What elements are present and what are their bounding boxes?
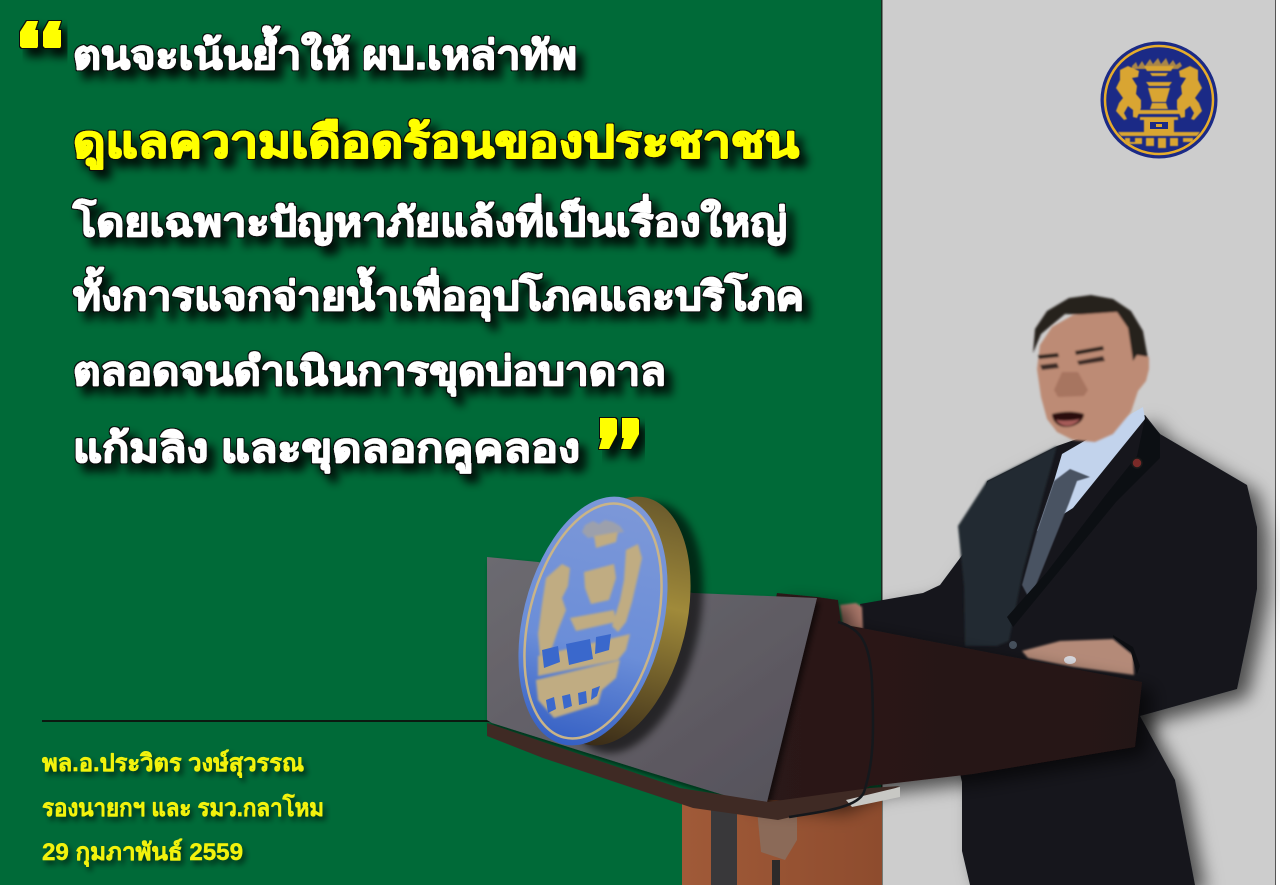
head [1033, 295, 1149, 442]
lectern leg wood [682, 795, 882, 885]
mouth [1052, 412, 1084, 427]
attribution text block [42, 749, 324, 868]
suit jacket left panel [958, 446, 1057, 646]
panel: grey photo panel [881, 0, 1276, 885]
footer divider line [42, 720, 490, 722]
panel: green quote panel [0, 0, 881, 885]
icon: government seal [1100, 42, 1218, 158]
nose shade [1054, 372, 1088, 397]
eyebrows [1038, 346, 1104, 359]
face [1037, 312, 1149, 442]
quote line 1: ตนจะเน้นย้ำให้ ผบ.เหล่าทัพ [73, 26, 577, 78]
attribution role: รองนายกฯ และ รมว.กลาโหม [42, 793, 324, 822]
quote line 4: ทั้งการแจกจ่ายน้ำเพื่ออุปโภคและบริโภค [73, 267, 804, 322]
lectern [487, 557, 1142, 885]
lectern emblem disc [494, 481, 727, 768]
hair [1033, 295, 1149, 366]
disc gold rim [517, 481, 715, 761]
panel divider line [881, 0, 882, 885]
attribution date: 29 กุมภาพันธ์ 2559 [42, 838, 243, 868]
person: speaker [840, 295, 1257, 885]
disc shadow [537, 488, 727, 768]
icon: opening quotation mark [20, 21, 61, 48]
lectern white strip [846, 787, 900, 807]
left hand [840, 603, 863, 629]
lectern underside strip [487, 723, 900, 820]
lectern top grey face [487, 557, 817, 802]
disc emblem pattern [536, 520, 642, 718]
ring [1064, 656, 1076, 664]
lapel pin [1132, 458, 1142, 468]
lectern front dark panel [735, 593, 1142, 804]
watch [1113, 635, 1140, 674]
icon: closing quotation mark [599, 418, 639, 449]
right edge line [1275, 0, 1276, 885]
right hand on lectern [1022, 639, 1134, 675]
disc face [494, 481, 692, 761]
quote text block [72, 26, 804, 474]
lapel [1007, 418, 1160, 627]
disc blue motifs [542, 634, 611, 713]
eyes [1040, 356, 1105, 370]
attribution name: พล.อ.ประวิตร วงษ์สุวรรณ [42, 749, 304, 779]
quote line 2 highlighted: ดูแลความเดือดร้อนของประชาชน [73, 118, 799, 169]
jacket button [1009, 641, 1017, 649]
shirt collar [1037, 407, 1145, 531]
microphone cable [789, 622, 873, 817]
quote line 3: โดยเฉพาะปัญหาภัยแล้งที่เป็นเรื่องใหญ่ [72, 194, 787, 246]
necktie [1022, 469, 1090, 600]
quote line 5: ตลอดจนดำเนินการขุดบ่อบาดาล [73, 350, 666, 397]
suit with cast shadow [860, 415, 1257, 885]
quote line 6: แก้มลิง และขุดลอกคูคลอง [73, 427, 580, 474]
